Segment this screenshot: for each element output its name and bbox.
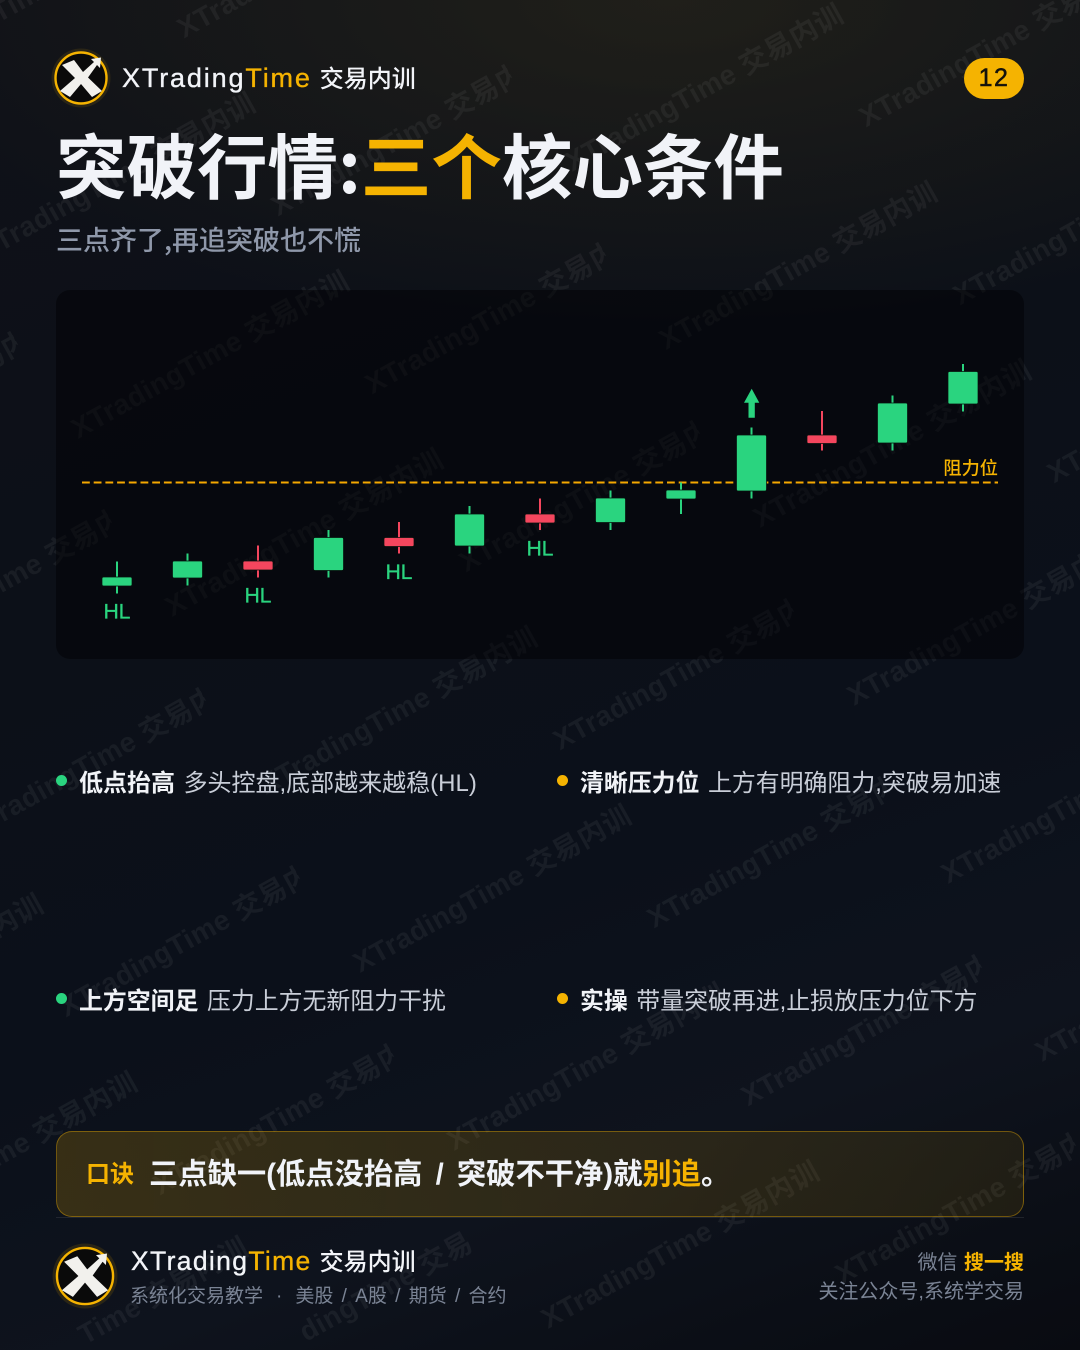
watermark pattern: XTradingTime 交易内训 [454,399,743,578]
watermark pattern: XTradingTime 交易内训 [654,176,943,355]
HL labels: HL [527,538,553,560]
page number badge [964,58,1024,99]
footer brand name: XTradingTime 交易内训 [131,1242,416,1277]
watermark pattern: XTradingTime 交易内训 [360,221,649,400]
HL labels: HL [386,561,412,584]
resistance line [82,482,998,484]
watermark pattern: XTradingTime 交易内训 [160,443,449,622]
page number badge: 12 [979,64,1009,92]
bullet: room above: 上方空间足 压力上方无新阻力干扰 [79,988,446,1015]
watermark pattern: XTradingTime 交易内训 [148,1022,437,1201]
callout label: 口诀 [86,1161,134,1188]
watermark pattern: XTradingTime 交易内训 [254,621,543,800]
subtitle: 三点齐了,再追突破也不慌 [56,219,361,258]
HL labels [104,538,553,624]
watermark pattern: XTradingTime 交易内训 [66,265,355,444]
header brand name: XTradingTime 交易内训 [122,59,416,94]
callout text: 三点缺一(低点没抬高 / 突破不干净)就别追。 [149,1158,730,1191]
watermark pattern: XTradingTime 交易内训 [642,755,931,934]
arrow: breakout up [744,389,759,418]
callout: mnemonic [56,1131,1024,1217]
watermark pattern: XTradingTime 交易内训 [736,933,1025,1112]
footer wechat search: 微信 搜一搜 [917,1252,1024,1274]
watermark pattern: XTradingTime 交易内训 [536,1155,825,1334]
HL labels: HL [104,600,130,624]
bullet: practice: 实操 带量突破再进,止损放压力位下方 [580,988,977,1015]
watermark pattern: XTradingTime 交易内训 [560,0,849,177]
watermark pattern: XTradingTime 交易内训 [348,799,637,978]
title: 突破行情:三个核心条件 [56,112,784,214]
bullet: clear resistance: 清晰压力位 上方有明确阻力,突破易加速 [580,770,1001,797]
watermark pattern: Time 交易内训 [73,1231,253,1350]
HL labels: HL [245,584,271,608]
footer tagline: 系统化交易教学 · 美股 / A股 / 期货 / 合约 [130,1286,507,1307]
footer divider [56,1217,1024,1218]
panel: candlestick chart [56,290,1024,659]
icon: header logo [52,48,110,108]
watermark pattern: XTradingTime 交易内训 [548,577,837,756]
resistance label: 阻力位 [943,454,998,480]
bullet: low points rising: 低点抬高 多头控盘,底部越来越稳(HL) [79,770,477,797]
candles [102,364,978,594]
watermark pattern: XTradingTime 交易内训 [748,354,1037,533]
watermark pattern: XTradingTime 交易内训 [266,43,555,222]
watermark pattern: XTradingTime 交易内训 [54,844,343,1023]
icon: footer logo [52,1244,118,1308]
watermark pattern: XTradingTime 交易内训 [442,977,731,1156]
watermark pattern: dingTime 交易 [294,1226,478,1347]
footer follow note: 关注公众号,系统学交易 [818,1281,1024,1303]
